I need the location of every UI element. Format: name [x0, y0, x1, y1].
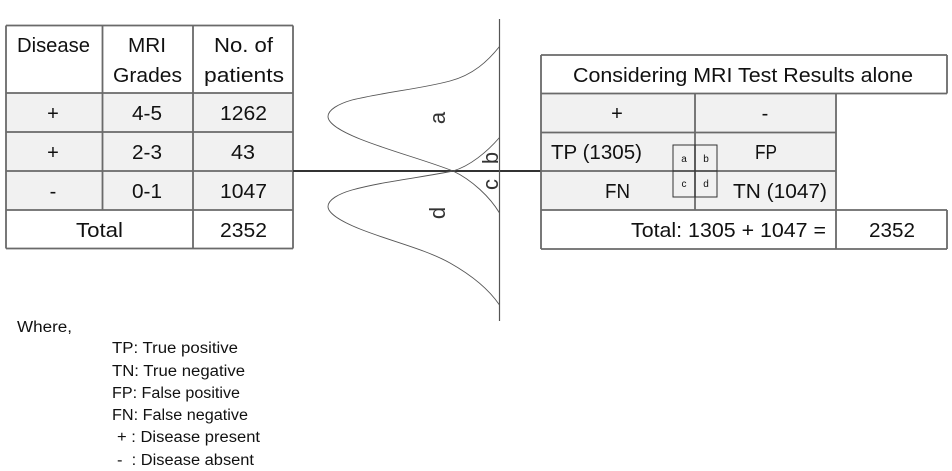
chart: distribution curves [293, 19, 541, 321]
results first row [551, 142, 777, 164]
table header: Disease [17, 35, 90, 57]
legend: + : Disease present [117, 429, 261, 446]
table header: Grades [113, 65, 182, 87]
table header [17, 35, 284, 87]
results total row: 2352 [869, 220, 915, 242]
table row: grades 2-3: 43 [231, 142, 255, 164]
small abcd grid: b [703, 154, 709, 165]
legend: TN: True negative [112, 363, 245, 380]
table row: grades 4-5: + [47, 103, 59, 125]
legend: TP: True positive [112, 340, 238, 357]
legend: FN: False negative [112, 407, 248, 424]
table total row: 2352 [220, 220, 267, 242]
table total row: Total [76, 220, 123, 242]
legend [17, 319, 261, 469]
panel: MRI test results table [541, 55, 947, 249]
table row: grades 4-5: 1262 [220, 103, 267, 125]
label: b: b [478, 152, 503, 164]
label: d: d [425, 207, 450, 219]
table row: grades 0-1: 1047 [220, 181, 267, 203]
legend: - : Disease absent [117, 452, 255, 469]
small abcd grid: c [682, 179, 686, 190]
label: c: c [478, 179, 503, 190]
legend: FP: False positive [112, 385, 240, 402]
table row: grades 2-3: + [47, 142, 59, 164]
table row: grades 4-5: 4-5 [132, 103, 162, 125]
table row: grades 2-3: 2-3 [132, 142, 162, 164]
table row: grades 0-1: 0-1 [132, 181, 162, 203]
small abcd grid: d [703, 179, 709, 190]
results second row [605, 181, 827, 203]
table header: MRI [128, 35, 166, 57]
table total row [76, 220, 267, 242]
results column headers: - [762, 103, 768, 125]
results table title: Considering MRI Test Results alone [573, 65, 913, 87]
results column headers: + [611, 103, 623, 125]
results column headers [611, 103, 768, 125]
small abcd grid: a [681, 154, 687, 165]
table header: No. of [214, 35, 273, 57]
table row: grades 2-3 [47, 142, 255, 164]
results first row: FP [755, 142, 777, 164]
results second row: TN (1047) [733, 181, 827, 203]
results total row [631, 220, 915, 242]
panel: patient table [6, 26, 293, 248]
table row: grades 0-1 [50, 181, 267, 203]
table header: patients [204, 65, 284, 87]
curve: disease negative [328, 171, 500, 305]
results first row: TP (1305) [551, 142, 642, 164]
small abcd grid [673, 145, 717, 197]
table row: grades 4-5 [47, 103, 267, 125]
curve: disease positive [328, 46, 500, 171]
legend: Where, [17, 319, 72, 336]
label: a: a [425, 111, 450, 124]
results second row: FN [605, 181, 630, 203]
table row: grades 0-1: - [50, 181, 56, 203]
results total row: Total: 1305 + 1047 = [631, 220, 826, 242]
